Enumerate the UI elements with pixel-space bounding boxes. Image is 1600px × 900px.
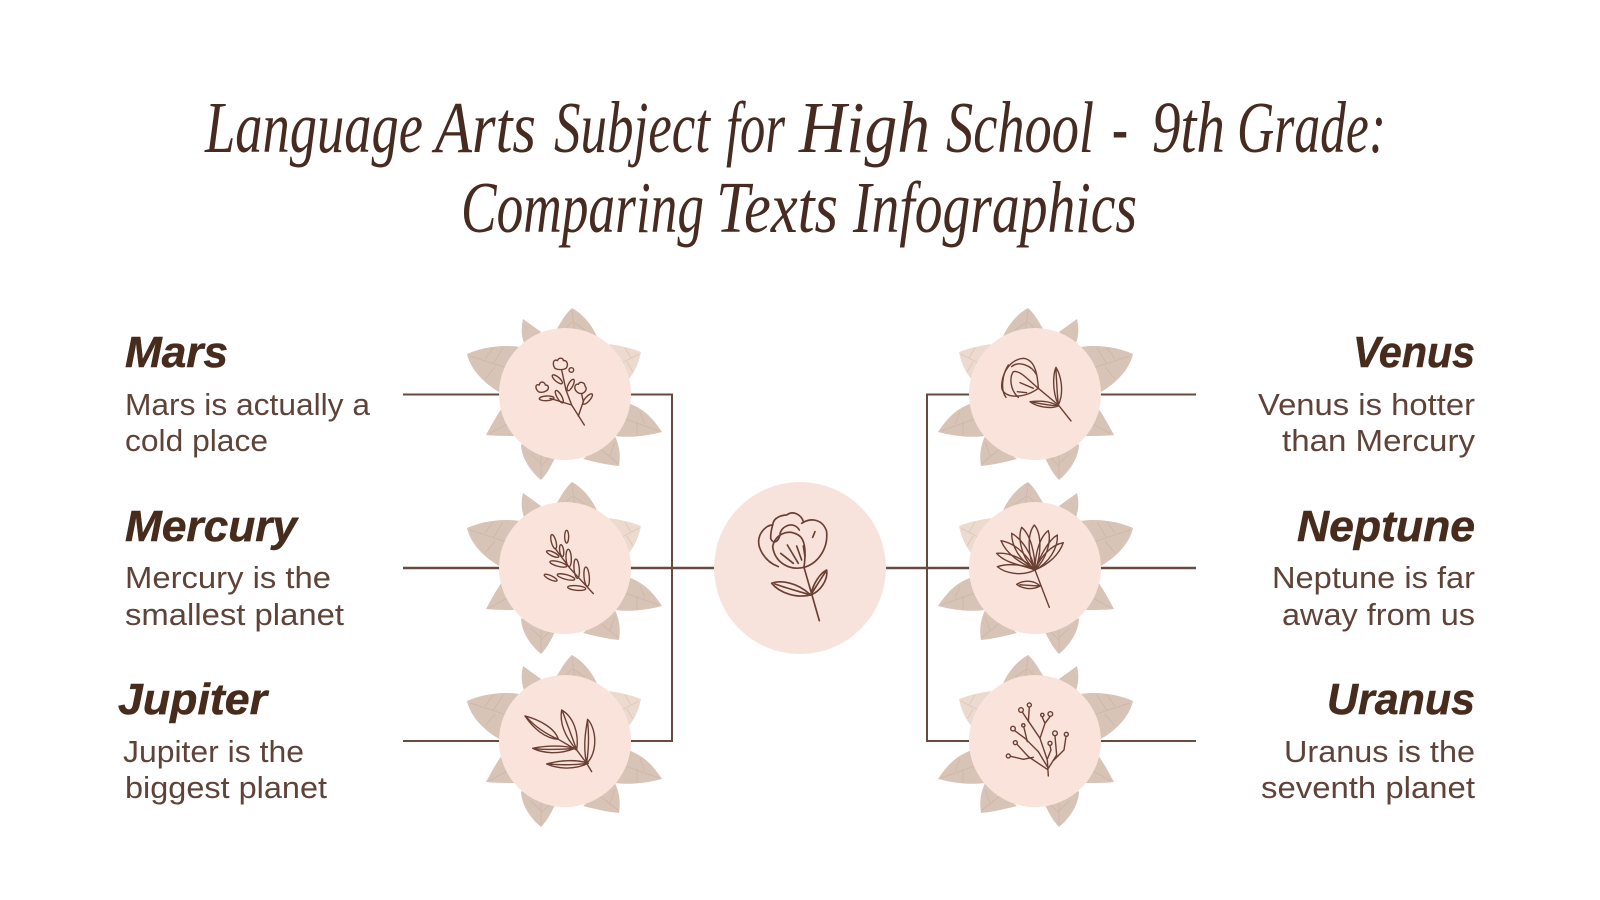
title: Grade:	[1237, 87, 1386, 168]
title: -	[1112, 87, 1128, 168]
text: Mercury	[125, 502, 344, 632]
icon: leafy branch	[543, 530, 593, 594]
title: Subject	[554, 87, 711, 168]
text: Mercury: Mercury	[125, 502, 300, 551]
icon: tulip	[1002, 358, 1071, 421]
text: Neptune: away from us	[1282, 597, 1475, 632]
icon: large leaves	[525, 710, 595, 772]
text: Neptune: Neptune	[1297, 502, 1475, 551]
icon: flowering sprig	[536, 358, 594, 425]
text: Neptune	[1272, 502, 1475, 632]
text: Mercury: Mercury is the	[125, 560, 331, 595]
text: Mars	[125, 328, 371, 458]
title: for	[726, 87, 785, 168]
text: Neptune: Neptune is far	[1272, 560, 1475, 595]
flower badge: Mercury	[467, 482, 662, 654]
text: Mars: cold place	[125, 423, 268, 458]
text: Jupiter	[118, 675, 327, 805]
title	[204, 87, 1386, 248]
icon: lotus	[997, 525, 1063, 607]
icon: berry branch	[1006, 703, 1068, 776]
central circle with flower icon	[714, 482, 886, 654]
title: High	[798, 87, 930, 168]
text: Jupiter: biggest planet	[125, 770, 327, 805]
text: Mars: Mars is actually a	[125, 387, 371, 422]
connector lines	[403, 394, 1196, 741]
flower badge: Neptune	[938, 482, 1133, 654]
flower badge: Uranus	[938, 655, 1133, 827]
text: Uranus: seventh planet	[1261, 770, 1475, 805]
title: Arts	[432, 87, 536, 168]
text: Uranus: Uranus	[1327, 675, 1475, 724]
flower badge: Mars	[467, 308, 662, 480]
flower badge: Jupiter	[467, 655, 662, 827]
text: Uranus: Uranus is the	[1284, 734, 1475, 769]
title: School	[946, 87, 1094, 168]
text: Uranus	[1261, 675, 1475, 805]
text: Jupiter: Jupiter is the	[123, 734, 304, 769]
text: Venus: Venus	[1353, 328, 1475, 377]
flower badge: Venus	[938, 308, 1133, 480]
title: 9th	[1152, 87, 1225, 168]
text: Venus: Venus is hotter	[1258, 387, 1475, 422]
text: Venus	[1258, 328, 1476, 458]
text: Mars: Mars	[125, 328, 228, 377]
text: Jupiter: Jupiter	[118, 675, 270, 724]
text: Mercury: smallest planet	[125, 597, 344, 632]
title: Comparing	[461, 167, 704, 248]
icon: peony	[759, 513, 827, 621]
title: Language	[204, 87, 423, 168]
text: Venus: than Mercury	[1282, 423, 1476, 458]
title: Texts	[716, 167, 838, 248]
title: Infographics	[852, 167, 1137, 248]
